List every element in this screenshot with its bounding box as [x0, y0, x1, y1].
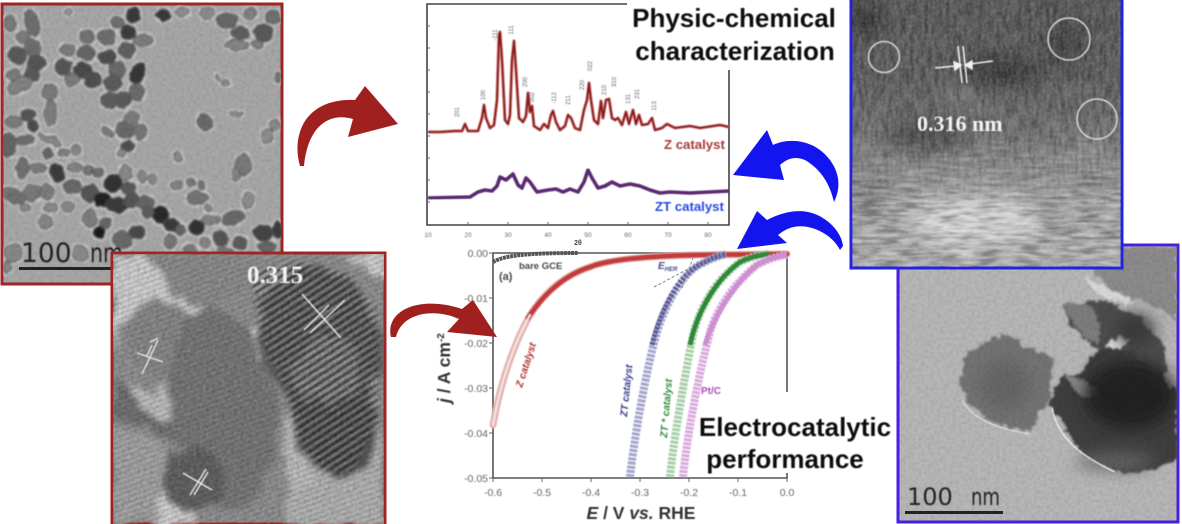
x axis labels: 40 — [544, 232, 552, 239]
peak labels: 022 — [588, 60, 594, 71]
panel: TEM image of Z catalyst nanoparticles — [0, 4, 283, 284]
panel: HRTEM image of ZT catalyst — [849, 0, 1122, 268]
y axis labels: -0.05 — [464, 473, 488, 485]
chart: XRD patterns — [424, 4, 729, 247]
lattice markers — [137, 294, 345, 495]
scale label: 100 — [907, 483, 953, 511]
x axis labels: 30 — [504, 232, 512, 239]
arrow: red, HRTEM to polarization curves — [390, 300, 497, 337]
scale label: nm — [971, 483, 1000, 511]
x axis labels: 50 — [584, 232, 592, 239]
x axis labels: -0.4 — [582, 487, 600, 499]
peak labels — [455, 25, 658, 117]
x axis labels: -0.3 — [631, 487, 649, 499]
y axis title: j / A cm — [434, 342, 454, 403]
plot frame — [427, 4, 729, 225]
curve: ZT catalyst — [630, 254, 726, 477]
peak labels: -112 — [552, 92, 558, 104]
heading: electrocatalytic performance: performance — [706, 444, 864, 474]
label: onset potential: E — [658, 261, 665, 272]
scale bar — [19, 267, 119, 270]
tangent lines for onset potential — [654, 258, 693, 288]
y axis title: -2 — [436, 333, 447, 342]
x axis labels: -0.5 — [533, 487, 551, 499]
y axis labels: 0.00 — [468, 248, 488, 260]
heading: electrocatalytic performance: Electrocatalytic — [699, 412, 891, 442]
peak labels: 200 — [523, 76, 529, 87]
scale label: nm — [90, 238, 123, 269]
label: panel a: (a) — [499, 271, 513, 283]
label: ZT catalyst: ZT catalyst — [619, 364, 636, 418]
axis ticks — [489, 253, 787, 482]
peak labels: 002 — [530, 91, 536, 102]
x axis labels: 10 — [424, 232, 432, 239]
heading: physic-chemical characterization: characterization — [635, 36, 835, 66]
plot frame — [493, 253, 787, 478]
x axis labels: 70 — [664, 232, 672, 239]
x axis title: E / V vs. RHE — [587, 503, 695, 523]
y axis labels: -0.02 — [464, 338, 488, 350]
nanoparticles — [0, 5, 283, 283]
x axis labels — [484, 487, 794, 499]
scale label: 100 — [21, 238, 72, 269]
peak labels: 220 — [580, 79, 586, 90]
y axis labels: -0.04 — [464, 428, 488, 440]
marked circles — [868, 18, 1117, 139]
y axis labels: -0.01 — [464, 293, 488, 305]
y axis labels: -0.03 — [464, 383, 488, 395]
x axis labels: 60 — [624, 232, 632, 239]
label: Pt/C: Pt/C — [701, 386, 721, 397]
x axis labels: 0.0 — [780, 487, 794, 499]
arrow: red, TEM to XRD — [297, 86, 398, 166]
x axis labels: -0.2 — [680, 487, 698, 499]
label: ZT catalyst: ZT catalyst — [655, 199, 725, 214]
lattice image — [113, 249, 401, 524]
x axis labels: 80 — [704, 232, 712, 239]
peak labels: 201 — [455, 106, 461, 117]
heading: physic-chemical characterization: Physic-chemical — [632, 3, 836, 33]
x axis labels: -0.6 — [484, 487, 502, 499]
lattice spacing arrows — [935, 46, 993, 83]
peak labels: 113 — [652, 101, 658, 111]
x axis labels — [424, 232, 712, 239]
x axis labels: -0.1 — [729, 487, 747, 499]
chart: polarization curves — [434, 248, 794, 523]
label: bare GCE: bare GCE — [519, 261, 562, 272]
peak labels: -111 — [493, 29, 499, 41]
panel: HRTEM image of Z catalyst — [112, 249, 401, 524]
curve: Pt/C — [683, 255, 787, 477]
peak labels: 111 — [509, 25, 515, 35]
curve: Z catalyst — [493, 254, 787, 425]
curve: ZT* catalyst — [670, 254, 769, 477]
flower-like particles — [899, 246, 1177, 521]
peak labels: 131 — [626, 93, 632, 104]
curve: bare GCE — [493, 253, 578, 262]
x axis title: 2θ — [574, 240, 582, 247]
peak labels: 231 — [635, 88, 641, 99]
peak labels: 210 — [602, 84, 608, 95]
curve: ZT catalyst — [428, 170, 729, 198]
label: ZT* catalyst: ZT * catalyst — [659, 378, 675, 439]
lattice spacing label: 0.316 nm — [917, 111, 1003, 136]
y axis labels — [464, 248, 488, 485]
arrow: blue, HRTEM to XRD — [733, 130, 838, 202]
arrow: blue, HRTEM to polarization curves — [737, 211, 843, 250]
peak labels: 211 — [566, 95, 572, 105]
scale bar — [905, 511, 1003, 514]
label: Z catalyst: Z catalyst — [514, 341, 539, 390]
x axis labels: 20 — [464, 232, 472, 239]
label: onset potential: HER — [665, 267, 678, 273]
axis ticks — [427, 26, 708, 225]
lattice spacing label: 0.315 — [247, 262, 303, 289]
peak labels: 310 — [612, 76, 618, 87]
curve: Z catalyst — [428, 32, 729, 132]
peak labels: 100 — [481, 89, 487, 100]
label: Z catalyst: Z catalyst — [664, 137, 725, 152]
lattice image — [849, 0, 1121, 267]
panel: TEM image of ZT catalyst — [898, 245, 1178, 522]
